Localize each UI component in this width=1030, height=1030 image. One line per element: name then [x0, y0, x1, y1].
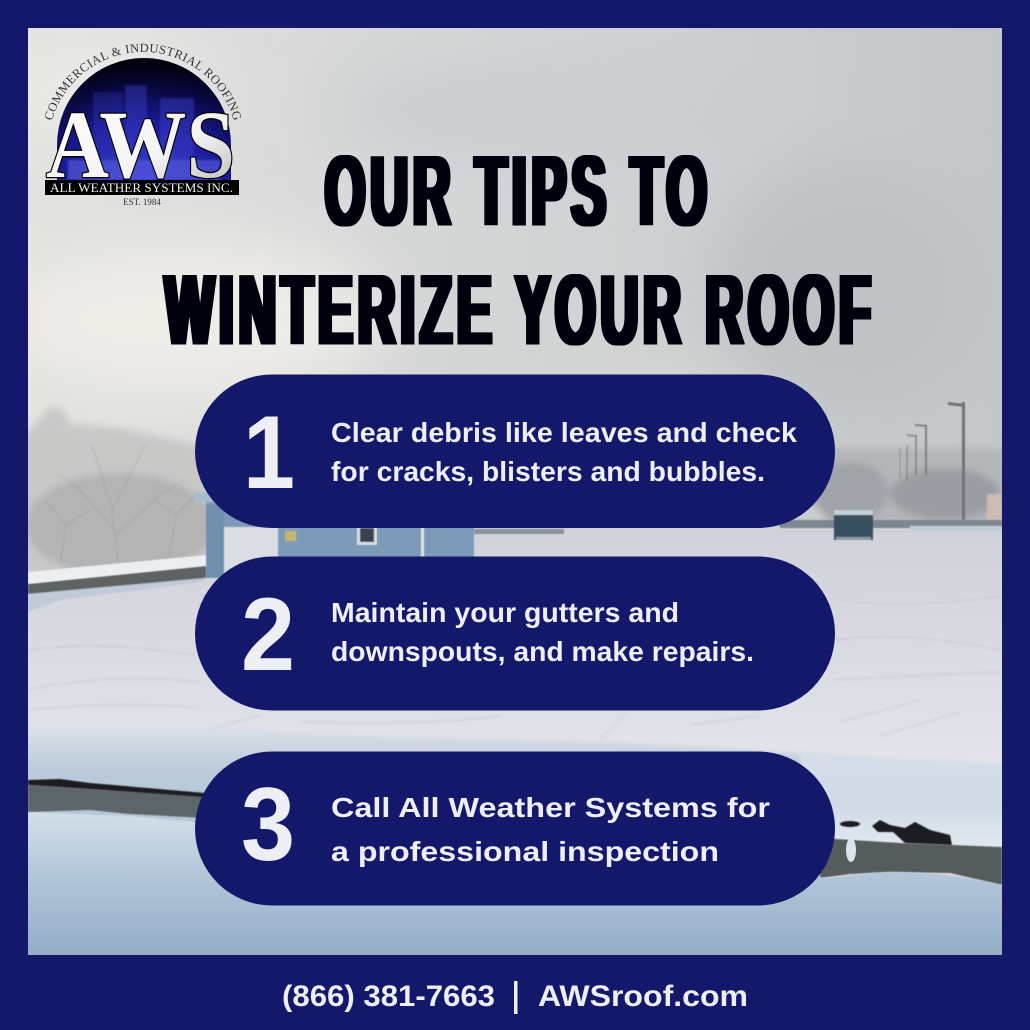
pill [195, 374, 835, 528]
number 2: 2 [241, 577, 295, 693]
clouds [28, 54, 901, 402]
near parapet right [820, 838, 1002, 885]
panel: tip 3 [195, 752, 835, 906]
established year: EST. 1984 [123, 197, 161, 207]
rooftop box unit [834, 510, 873, 540]
pill [195, 556, 835, 710]
distant misty treeline right [812, 447, 1002, 520]
tip 1 line 1: Clear debris like leaves and check [331, 417, 797, 448]
AWS letters: AWS [46, 91, 235, 198]
logo dome [57, 58, 231, 180]
distant misty treeline left [28, 406, 206, 594]
tip 3 line 2: a professional inspection [331, 836, 719, 867]
phone number: (866) 381-7663 [282, 980, 495, 1013]
left parapet with snow [28, 555, 206, 612]
footer contact line [282, 980, 748, 1014]
bare tree branches [62, 447, 144, 480]
tip 2 line 2: downspouts, and make repairs. [331, 636, 754, 667]
snow foreground [20, 812, 1010, 960]
tip 3 line 1: Call All Weather Systems for [331, 792, 770, 823]
panel: tip 1 [195, 374, 835, 528]
metal building [195, 492, 474, 578]
tip 2 line 1: Maintain your gutters and [331, 597, 679, 628]
separator [514, 981, 518, 1014]
photo base [817, 858, 1002, 886]
snowy roof surface [20, 527, 1010, 780]
panel: tip 2 [195, 556, 835, 710]
building at right edge [987, 494, 1002, 520]
icicle highlight [846, 838, 856, 862]
snow bank right [800, 756, 1002, 847]
lamp posts [899, 402, 965, 520]
number 1: 1 [243, 395, 295, 511]
company name band [45, 180, 239, 195]
tip 1 line 2: for cracks, blisters and bubbles. [331, 456, 765, 487]
snow drift texture [30, 679, 949, 739]
logo skyline [68, 85, 220, 180]
arc slogan: COMMERCIAL & INDUSTRIAL ROOFING [45, 44, 242, 120]
far parapet right [474, 520, 1002, 534]
sky [28, 28, 1002, 548]
company name: ALL WEATHER SYSTEMS INC. [50, 180, 233, 195]
title [165, 135, 876, 365]
website: AWSroof.com [538, 980, 748, 1013]
snow bank left and centre [28, 730, 802, 822]
pill [195, 752, 835, 906]
number 3: 3 [241, 767, 295, 883]
dark exposed patches [28, 779, 952, 845]
logo: AWS All Weather Systems [45, 44, 242, 207]
near parapet left [28, 785, 205, 818]
